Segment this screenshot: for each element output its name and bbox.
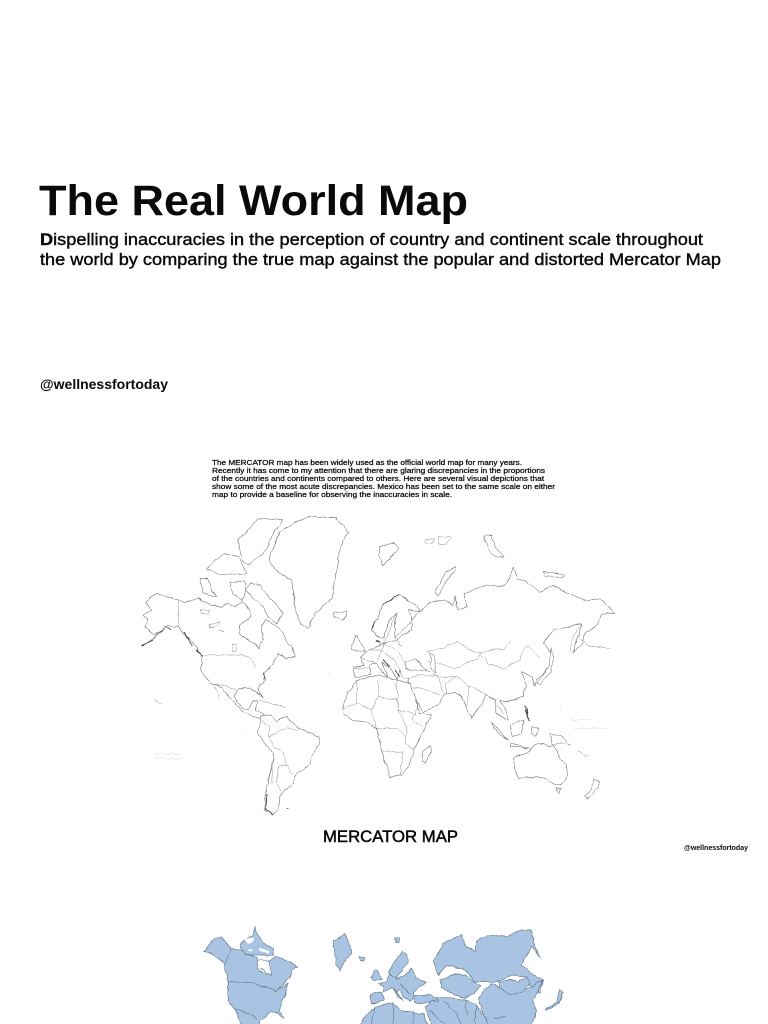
Greenland — [268, 517, 348, 628]
small handle: @wellnessfortoday — [684, 843, 749, 852]
Patagonia dark coast — [266, 795, 288, 815]
Caribbean islands — [154, 699, 285, 716]
Ellesmere Island — [238, 518, 283, 565]
North America — [142, 593, 295, 723]
Iceland — [333, 611, 347, 621]
Africa — [343, 675, 432, 777]
map label: MERCATOR MAP — [323, 828, 458, 846]
intro paragraph: of the countries and continents compared to others. Here are several visual depictions that — [212, 474, 545, 483]
intro paragraph — [212, 458, 556, 499]
Middle East — [425, 997, 508, 1024]
Russia — [433, 930, 543, 993]
intro paragraph: map to provide a baseline for observing the inaccuracies in scale. — [212, 490, 452, 499]
Eurasia and Africa — [358, 930, 563, 1024]
Europe — [378, 968, 426, 1002]
Victoria Island — [200, 578, 217, 597]
Greenland — [333, 934, 352, 971]
South America — [258, 715, 319, 815]
Arctic islands — [379, 535, 563, 597]
Japan — [546, 991, 563, 1011]
Mercator world map — [142, 517, 615, 815]
Black Sea — [405, 660, 427, 671]
Philippines — [525, 710, 530, 722]
Central and South Asia borders — [408, 671, 503, 713]
Alaska and US borders — [178, 600, 257, 698]
North America — [204, 937, 298, 1024]
North America and Greenland — [204, 927, 365, 1024]
UK — [371, 969, 382, 981]
scattered islands — [153, 673, 607, 815]
Japan — [537, 648, 554, 685]
Arctic Archipelago — [240, 927, 274, 955]
Kazakhstan and Mongolia borders — [427, 642, 540, 668]
Southeast Asia islands — [492, 707, 588, 757]
European borders — [353, 613, 405, 670]
Mongolia — [498, 977, 530, 995]
intro paragraph: The MERCATOR map has been widely used as the official world map for many years. — [212, 458, 522, 467]
Asia and Europe — [353, 567, 615, 720]
Iceland — [358, 957, 365, 962]
subtitle: Dispelling inaccuracies in the perception of country and continent scale throughout — [40, 231, 703, 249]
subtitle — [40, 231, 721, 269]
British Isles — [352, 635, 366, 652]
dark Nordic and Balkan coasts — [372, 595, 399, 677]
Africa borders — [343, 680, 423, 775]
internal borders — [370, 983, 505, 1024]
Americas and Arctic — [142, 517, 348, 723]
Queen Elizabeth Islands — [207, 553, 247, 575]
Australia — [513, 743, 567, 785]
subtitle: the world by comparing the true map against the popular and distorted Mercator Map — [40, 251, 721, 269]
Tasmania — [556, 788, 561, 793]
New Zealand — [584, 778, 600, 799]
author handle: @wellnessfortoday — [40, 377, 169, 392]
Banks Island — [230, 581, 247, 601]
Hudson Bay — [257, 960, 272, 975]
Svalbard — [395, 937, 399, 943]
South America borders — [262, 720, 298, 793]
China — [478, 981, 543, 1024]
true scale world map — [204, 927, 563, 1024]
Archipelago channels — [245, 938, 269, 953]
Scandinavia — [388, 952, 408, 978]
Baffin Island — [247, 583, 283, 623]
Iberia — [371, 992, 384, 1003]
Scandinavia — [372, 595, 420, 638]
Canada, US and Mexico borders — [225, 948, 275, 1018]
Turkey — [413, 995, 438, 1003]
Pacific island dots — [580, 638, 612, 648]
intro paragraph: show some of the most acute discrepancies. Mexico has been set to the same scale on either — [212, 482, 556, 491]
Eurasia group — [352, 567, 615, 722]
Caspian Sea — [429, 653, 436, 673]
title: The Real World Map — [39, 177, 468, 225]
Madagascar — [422, 746, 431, 763]
bay islands — [200, 609, 237, 652]
Africa — [358, 1003, 430, 1024]
Pacific coast dark fjords — [142, 627, 266, 680]
Central Asia — [440, 975, 480, 998]
Southern and Old World — [153, 535, 607, 815]
intro paragraph: Recently it has come to my attention that there are glaring discrepancies in the proportions — [212, 466, 545, 475]
Sakhalin — [570, 623, 582, 652]
